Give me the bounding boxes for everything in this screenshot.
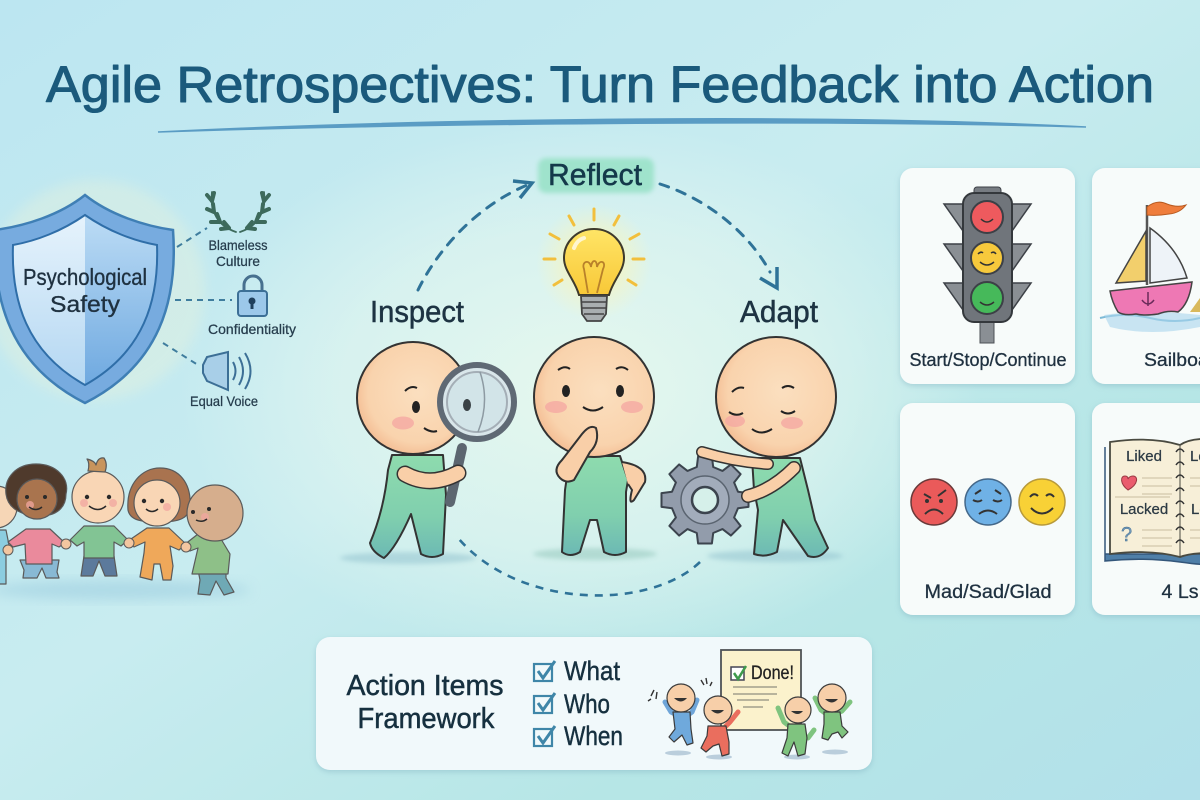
checklist text: Who <box>564 689 610 719</box>
heading: adapt: Adapt <box>740 294 818 329</box>
illustration: done note and celebrating team <box>648 650 850 760</box>
cycle arrow: inspect to reflect <box>418 185 527 290</box>
cycle arrow: adapt to inspect <box>458 538 700 595</box>
background <box>236 159 1200 800</box>
heading <box>346 670 504 735</box>
figure: adapt <box>662 337 843 562</box>
reflect highlight <box>538 158 654 193</box>
arrowhead <box>513 181 532 198</box>
label: blameless culture: Blameless <box>208 237 268 253</box>
title underline <box>158 119 1086 132</box>
shield label: Safety <box>50 291 120 317</box>
label: 4 Ls <box>1162 582 1198 603</box>
figure: inspect <box>340 342 514 564</box>
label: blameless culture: Culture <box>216 253 260 269</box>
icon: traffic light <box>944 187 1031 343</box>
cycle arrow: reflect to adapt <box>660 184 770 272</box>
heading: Action Items <box>346 670 504 702</box>
label: equal voice: Equal Voice <box>190 393 258 409</box>
icon: padlock <box>238 276 267 316</box>
heading: reflect: Reflect <box>548 157 642 192</box>
icon: shield <box>0 180 205 403</box>
icon: open book: Lacked <box>1120 501 1168 518</box>
heading: inspect: Inspect <box>370 294 464 329</box>
panel: mad/sad/glad <box>900 403 1075 615</box>
icon: open book: Liked <box>1126 448 1162 465</box>
checklist text <box>564 656 623 751</box>
arrowhead <box>760 267 777 288</box>
icon: glad face <box>1019 479 1065 525</box>
panel: psychological safety <box>0 180 296 409</box>
heading: Framework <box>358 703 495 735</box>
panel: 4 Ls <box>1092 403 1200 615</box>
panel: sailboat <box>1092 168 1200 384</box>
icon: mad face <box>911 479 957 525</box>
shield label <box>23 264 147 317</box>
checklist text: When <box>564 721 623 751</box>
label: Start/Stop/Continue <box>910 350 1066 370</box>
panel: start/stop/continue <box>900 168 1075 384</box>
illustration: done note and celebrating team: Done! <box>751 663 794 684</box>
figure: reflect <box>533 337 657 560</box>
shield label: Psychological <box>23 264 147 290</box>
connectors <box>163 228 232 365</box>
icon: speaker <box>203 352 250 390</box>
icon: gear <box>662 456 748 544</box>
icon: sailboat <box>1100 202 1200 332</box>
panel: action items framework <box>316 637 872 770</box>
icon: open book <box>1105 439 1200 564</box>
label: blameless culture <box>209 240 268 266</box>
icon: open book: ? <box>1121 524 1132 546</box>
icon: laurel <box>207 192 269 232</box>
label: Mad/Sad/Glad <box>924 582 1052 603</box>
icon: sad face <box>965 479 1011 525</box>
checklist <box>534 661 555 746</box>
checklist text: What <box>564 656 620 686</box>
title: Agile Retrospectives: Turn Feedback into Action <box>46 56 1154 113</box>
illustration: team holding hands <box>0 458 250 600</box>
icon: light bulb <box>542 208 646 322</box>
label: confidentiality: Confidentiality <box>208 321 296 337</box>
